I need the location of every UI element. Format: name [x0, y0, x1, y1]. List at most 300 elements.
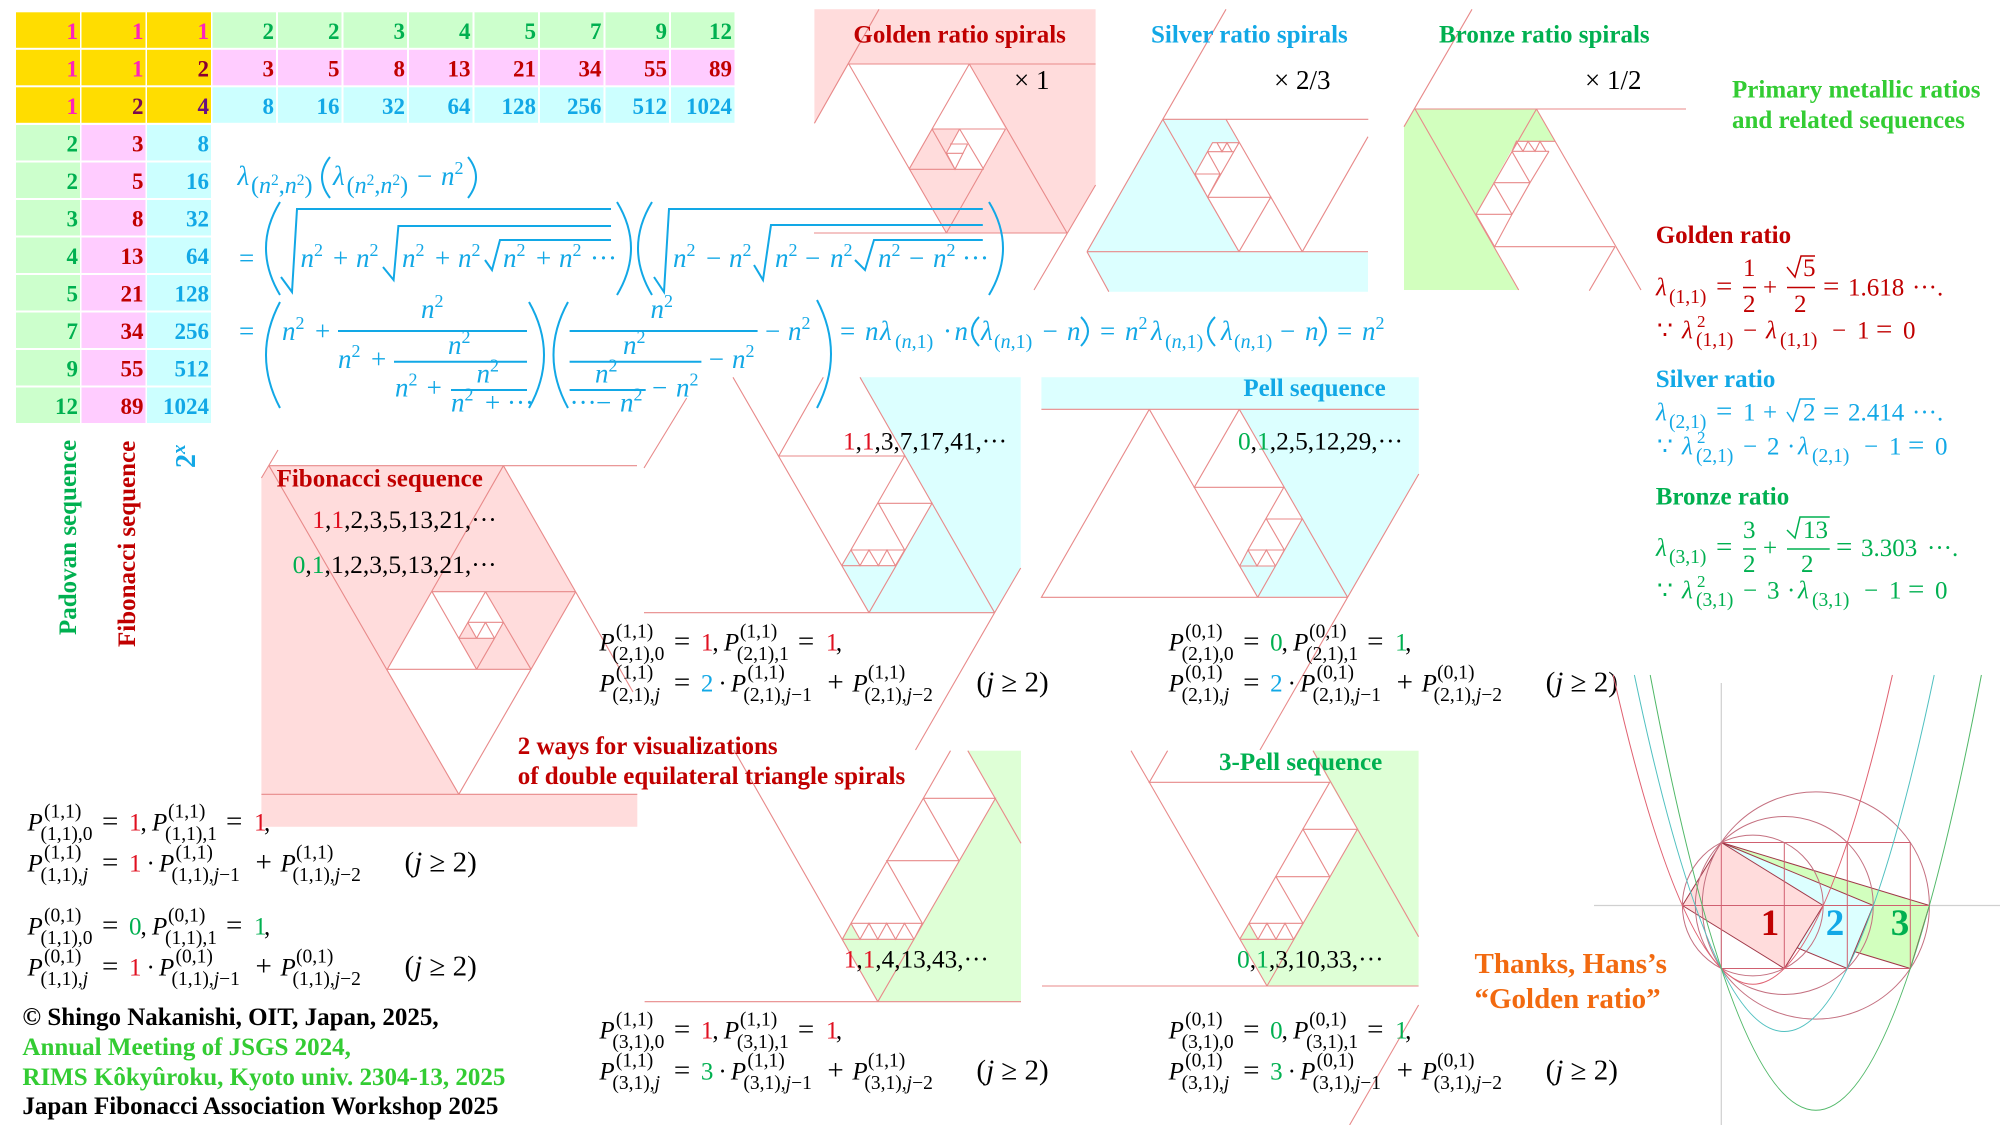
formula line 2: nested radicals: 2: [314, 240, 323, 260]
formula line 2: nested radicals: 2: [572, 240, 582, 260]
formula: P(0,1) over (1,1): ,: [140, 913, 147, 940]
panel: silver ratio spiral: [1087, 9, 1368, 292]
table numbers: 21: [513, 56, 536, 82]
table numbers: 34: [578, 56, 602, 82]
formula line 3: continued fractions: n: [595, 359, 608, 389]
axes: [1594, 683, 2000, 1125]
formula line 2: nested radicals: 2: [416, 240, 424, 260]
table numbers: 5: [132, 169, 144, 194]
table numbers: 9: [66, 357, 78, 382]
table numbers: 1: [132, 56, 144, 82]
table numbers: 55: [644, 56, 667, 82]
label: 2 to the x: x: [169, 444, 190, 455]
formula line 2: nested radicals: 2: [516, 240, 526, 260]
formula: P(1,1) over (1,1): 1: [129, 810, 142, 837]
formula line 3: continued fractions: n: [395, 373, 408, 403]
formula line 3: continued fractions: =: [1100, 316, 1115, 346]
formula: P(0,1) over (3,1): P: [1168, 1058, 1184, 1085]
table numbers: 13: [448, 56, 470, 82]
heading: primary metallic ratios: [1732, 76, 1981, 134]
block: bronze ratio definition: [1655, 484, 1958, 611]
top rows: [212, 12, 734, 123]
formula: nested radical and continued fraction identity: [236, 157, 1384, 418]
formula: P(0,1) over (2,1): =: [1243, 626, 1259, 658]
formula line 1: ,: [279, 173, 285, 199]
panel: 3-Pell spiral: [1042, 751, 1419, 1125]
block: bronze ratio definition: −: [1864, 578, 1878, 605]
block: bronze ratio definition: 13: [1803, 517, 1828, 544]
formula: P(0,1) over (3,1): ·: [1288, 1058, 1296, 1085]
note: 2 ways for visualizations: [518, 733, 905, 790]
formula: P(0,1) over (3,1): (3,1),j: [1182, 1073, 1229, 1094]
formula line 3: continued fractions: ···: [507, 388, 534, 418]
label: Padovan sequence: Padovan sequence: [55, 440, 82, 635]
formula: P(1,1) over (2,1): (1,1): [740, 622, 777, 643]
formula line 3: continued fractions: n: [676, 373, 690, 403]
block: golden ratio definition: λ: [1655, 275, 1667, 302]
heading: Fibonacci sequence: Fibonacci sequence: [277, 466, 483, 493]
bronze rectangle: [1702, 842, 1929, 968]
formula line 3: continued fractions: −: [1042, 316, 1058, 346]
table numbers: 89: [120, 394, 144, 419]
formula line 2: nested radicals: 2: [892, 240, 900, 260]
block: golden ratio definition: =: [1823, 271, 1839, 303]
formula line 2: nested radicals: n: [559, 243, 572, 273]
table numbers: 8: [262, 94, 274, 119]
formula: P(0,1) over (2,1): (0,1): [1309, 622, 1346, 643]
formula: P(0,1) over (1,1): ·: [146, 954, 155, 981]
formula line 3: continued fractions: n: [623, 330, 636, 360]
formula line 3: continued fractions: =: [239, 316, 254, 346]
corner cells: [16, 12, 211, 123]
formula: P(1,1) over (2,1): =: [674, 667, 690, 699]
block: bronze ratio definition: (3,1): [1669, 547, 1706, 568]
formula line 3: continued fractions: 2: [746, 341, 754, 361]
table numbers: 5: [66, 282, 78, 307]
formula line 2: nested radicals: 2: [742, 240, 752, 260]
diagram: parabolas, circles and metallic rectangles: [1594, 675, 2000, 1125]
sequence: Fibonacci seeds 0,1: 0,1,1,2,3,5,13,21,···: [293, 552, 497, 579]
formula: P(1,1) over (3,1): (3,1),1: [737, 1032, 789, 1053]
formula: P(1,1) over (2,1): (2,1),j: [612, 685, 660, 706]
block: silver ratio definition: 2: [1803, 400, 1816, 427]
formula: P(1,1) over (2,1): (1,1): [616, 622, 653, 643]
formula line 3: continued fractions: (: [895, 331, 902, 353]
heading: bronze ratio spirals: Bronze ratio spirals: [1439, 22, 1650, 49]
formula line 2: nested radicals: 2: [370, 240, 378, 260]
formula: P(1,1) over (3,1): [598, 1009, 1049, 1094]
block: silver ratio definition: Silver ratio: [1656, 366, 1775, 393]
thanks note: Thanks, Hans’s: [1474, 948, 1667, 980]
formula: P(0,1) over (3,1): 1: [1395, 1017, 1408, 1044]
formula: P(1,1) over (3,1): =: [798, 1013, 814, 1045]
formula line 3: continued fractions: +: [427, 373, 442, 403]
formula: P(0,1) over (1,1): (1,1),j: [40, 969, 88, 990]
formula: P(0,1) over (2,1): ,: [1282, 630, 1288, 657]
formula line 3: continued fractions: n: [476, 359, 490, 389]
block: golden ratio definition: =: [1716, 271, 1732, 303]
formula: P(1,1) over (1,1): [26, 802, 477, 886]
thanks note: “Golden ratio”: [1474, 983, 1661, 1015]
block: golden ratio definition: (1,1): [1669, 287, 1706, 308]
formula line 2: nested radicals: +: [333, 243, 348, 273]
formula line 2: nested radicals: 2: [946, 240, 956, 260]
formula line 2: nested radicals: 2: [686, 240, 696, 260]
formula line 3: continued fractions: [239, 291, 1384, 418]
numeral 1: 1: [1761, 903, 1779, 944]
block: silver ratio definition: 1: [1743, 400, 1756, 427]
table numbers: 2: [66, 169, 78, 194]
formula line 1: ): [304, 173, 312, 199]
formula: P(0,1) over (1,1): P: [26, 913, 43, 940]
table numbers: 32: [186, 207, 209, 232]
table numbers: 64: [448, 94, 471, 119]
block: bronze ratio definition: (3,1): [1812, 590, 1849, 611]
block: golden ratio definition: ···.: [1912, 275, 1943, 302]
formula: P(0,1) over (2,1): (0,1): [1185, 622, 1222, 643]
formula line 3: continued fractions: n: [788, 316, 802, 346]
block: silver ratio definition: ·: [1787, 434, 1795, 461]
formula: P(1,1) over (2,1): ,: [712, 630, 719, 657]
table numbers: 256: [567, 94, 602, 119]
formula: P(0,1) over (1,1): (1,1),j−1: [172, 969, 240, 990]
formula line 3: continued fractions: 2: [636, 327, 646, 347]
golden rectangle: [1682, 842, 1823, 968]
formula: P(0,1) over (1,1): ,: [264, 913, 270, 940]
formula: P(0,1) over (2,1): =: [1367, 626, 1383, 658]
formula: P(1,1) over (1,1): (1,1),j−1: [172, 865, 240, 886]
block: bronze ratio definition: 0: [1935, 578, 1948, 605]
formula: P(0,1) over (1,1): (1,1),0: [40, 928, 92, 949]
circles: [1682, 792, 1929, 1019]
block: silver ratio definition: ···.: [1912, 400, 1943, 427]
formula: P(1,1) over (3,1): (3,1),0: [612, 1032, 664, 1053]
formula: P(0,1) over (2,1): P: [1421, 671, 1437, 698]
formula line 1: 2: [367, 172, 374, 189]
formula line 3: continued fractions: 2: [690, 370, 698, 390]
block: bronze ratio definition: λ: [1681, 578, 1693, 605]
block: golden ratio definition: 1: [1857, 318, 1870, 345]
block: bronze ratio definition: 2: [1697, 572, 1706, 591]
formula: P(1,1) over (3,1): ,: [836, 1017, 842, 1044]
table numbers: 7: [590, 19, 602, 44]
sequence: Fibonacci seeds 1,1: 1,1,2,3,5,13,21,···: [312, 507, 497, 534]
table numbers: 9: [656, 19, 667, 44]
formula: P(0,1) over (2,1): 2: [1270, 671, 1283, 698]
formula: P(1,1) over (3,1): =: [674, 1013, 690, 1045]
formula line 3: continued fractions: λ: [1150, 316, 1163, 346]
formula line 3: continued fractions: 2: [664, 291, 673, 311]
formula: P(1,1) over (2,1): P: [851, 671, 868, 698]
formula line 2: nested radicals: 2: [844, 240, 852, 260]
formula: P(0,1) over (3,1): 3: [1270, 1058, 1283, 1085]
formula line 2: nested radicals: n: [503, 243, 516, 273]
formula: P(1,1) over (1,1): (1,1),1: [165, 824, 217, 845]
formula: P(0,1) over (2,1): (j ≥ 2): [1546, 667, 1618, 699]
formula line 3: continued fractions: −: [596, 388, 611, 418]
formula: P(1,1) over (1,1): 1: [129, 851, 142, 878]
formula: P(0,1) over (2,1): P: [1292, 630, 1308, 657]
formula line 2: nested radicals: n: [673, 243, 686, 273]
silver rectangle: [1695, 842, 1873, 968]
table numbers: 8: [132, 207, 144, 232]
table numbers: 64: [186, 244, 210, 269]
formula: P(0,1) over (2,1): (0,1): [1437, 663, 1474, 684]
block: silver ratio definition: =: [1823, 396, 1839, 428]
sequence: Pell numbers: 0,1,2,5,12,29,···: [1238, 428, 1403, 455]
formula: P(1,1) over (2,1): (2,1),j−1: [743, 685, 812, 706]
table numbers: 12: [709, 19, 732, 44]
table numbers: 2: [66, 132, 78, 157]
table numbers: 3: [394, 19, 405, 44]
table numbers: 8: [198, 132, 209, 157]
formula: P(0,1) over (2,1): (0,1): [1317, 663, 1354, 684]
formula: P(0,1) over (2,1): ·: [1288, 671, 1296, 698]
label: 2 to the x: 2: [171, 454, 202, 468]
block: bronze ratio definition: =: [1716, 531, 1732, 563]
formula: P(0,1) over (3,1): P: [1168, 1017, 1184, 1044]
formula: P(1,1) over (2,1): P: [730, 671, 746, 698]
formula line 3: continued fractions: n: [451, 388, 464, 418]
formula: P(1,1) over (3,1): =: [674, 1054, 690, 1086]
panel: (3,1) spiral with seeds 1,1: [645, 750, 1021, 1002]
block: bronze ratio definition: λ: [1655, 535, 1667, 562]
table numbers: 128: [502, 94, 536, 119]
formula: P(0,1) over (2,1): (0,1): [1185, 663, 1222, 684]
formula: P(1,1) over (2,1): P: [723, 630, 739, 657]
formula: P(1,1) over (1,1): (j ≥ 2): [404, 847, 477, 879]
block: bronze ratio definition: 2: [1743, 551, 1756, 578]
formula: P(1,1) over (3,1): P: [598, 1017, 615, 1044]
block: silver ratio definition: 0: [1935, 434, 1948, 461]
formula line 2: nested radicals: n: [300, 243, 314, 273]
formula: P(1,1) over (2,1): (2,1),1: [737, 644, 789, 665]
formula line 2: nested radicals: ···: [590, 243, 617, 273]
formula: P(1,1) over (2,1): 1: [826, 630, 838, 657]
formula line 2: nested radicals: 2: [788, 240, 798, 260]
formula: P(1,1) over (2,1): 2: [701, 671, 713, 698]
formula: P(0,1) over (2,1): P: [1299, 671, 1315, 698]
formula line 3: continued fractions: 2: [1138, 313, 1148, 333]
block: golden ratio definition: 1.618: [1848, 275, 1904, 302]
formula: P(1,1) over (3,1): (1,1): [868, 1050, 905, 1071]
block: golden ratio definition: −: [1832, 318, 1846, 345]
block: silver ratio definition: λ: [1797, 434, 1809, 461]
formula: P(0,1) over (3,1): [1168, 1009, 1618, 1094]
formula: P(1,1) over (2,1): P: [598, 630, 615, 657]
formula line 2: nested radicals: +: [536, 243, 551, 273]
formula line 3: continued fractions: ···: [570, 388, 597, 418]
credits: Japan Fibonacci Association Workshop 2025: [22, 1093, 498, 1120]
formula line 2: nested radicals: +: [435, 243, 450, 273]
formula line 2: nested radicals: −: [909, 243, 924, 273]
scale: times 1: × 1: [1014, 65, 1049, 95]
formula line 3: continued fractions: n: [732, 344, 746, 374]
thanks note: [1474, 948, 1667, 1015]
note: 2 ways for visualizations: of double equilateral triangle spirals: [518, 763, 905, 790]
table numbers: 1: [132, 19, 144, 44]
table numbers: 2: [262, 19, 274, 44]
block: bronze ratio definition: 1: [1889, 578, 1902, 605]
formula: P(0,1) over (3,1): (0,1): [1317, 1050, 1354, 1071]
formula: P(1,1) over (2,1): (1,1): [747, 663, 785, 684]
block: golden ratio definition: (1,1): [1780, 330, 1817, 351]
formula: P(1,1) over (1,1): P: [158, 851, 174, 878]
block: golden ratio definition: λ: [1765, 318, 1777, 345]
formula line 2: nested radicals: ···: [962, 243, 989, 273]
formula: P(0,1) over (3,1): ,: [1405, 1017, 1411, 1044]
formula line 3: continued fractions: n: [1125, 316, 1138, 346]
table numbers: 512: [174, 357, 209, 382]
formula: P(0,1) over (1,1): P: [280, 954, 296, 981]
formula line 3: continued fractions: 2: [464, 385, 474, 405]
formula: P(1,1) over (1,1): 1: [254, 810, 266, 837]
formula line 3: continued fractions: n: [421, 294, 434, 324]
formula line 3: continued fractions: 2: [408, 370, 418, 390]
formula line 2: nested radicals: n: [458, 243, 472, 273]
formula: P(1,1) over (1,1): =: [102, 806, 118, 838]
formula: P(0,1) over (3,1): (0,1): [1437, 1050, 1474, 1071]
table numbers: 34: [120, 319, 144, 344]
block: bronze ratio definition: −: [1743, 578, 1757, 605]
formula: P(0,1) over (2,1): (2,1),1: [1306, 644, 1358, 665]
formula line 3: continued fractions: 2: [608, 356, 618, 376]
formula: P(1,1) over (2,1): (1,1): [616, 663, 653, 684]
block: silver ratio definition: +: [1763, 400, 1777, 427]
formula: P(0,1) over (2,1): (2,1),j: [1182, 685, 1229, 706]
block: bronze ratio definition: 3.303: [1861, 535, 1917, 562]
parabolas: [1613, 675, 1981, 1110]
formula: P(0,1) over (1,1): 1: [254, 913, 266, 940]
formula: P(1,1) over (1,1): ·: [146, 851, 155, 878]
formula: P(0,1) over (1,1): 1: [129, 954, 142, 981]
formula: P(0,1) over (2,1): (2,1),j−1: [1313, 685, 1381, 706]
formula: P(0,1) over (1,1): (0,1): [176, 946, 213, 967]
block: silver ratio definition: (2,1): [1696, 446, 1733, 467]
block: silver ratio definition: 2.414: [1848, 400, 1905, 427]
block: silver ratio definition: −: [1864, 434, 1878, 461]
block: golden ratio definition: [1655, 222, 1943, 351]
block: silver ratio definition: 2: [1697, 428, 1706, 447]
block: golden ratio definition: 5: [1803, 255, 1816, 282]
formula: P(1,1) over (3,1): (3,1),j−2: [864, 1073, 933, 1094]
formula: P(1,1) over (3,1): P: [730, 1058, 746, 1085]
heading: Pell sequence: Pell sequence: [1243, 375, 1386, 402]
formula line 3: continued fractions: +: [485, 388, 500, 418]
block: silver ratio definition: 1: [1889, 434, 1902, 461]
block: silver ratio definition: λ: [1655, 400, 1667, 427]
scale: times 2/3: × 2/3: [1274, 65, 1330, 95]
formula line 1: 2: [271, 172, 279, 189]
formula: P(1,1) over (3,1): 1: [701, 1017, 713, 1044]
formula line 3: continued fractions: n: [620, 388, 634, 418]
formula: P(1,1) over (3,1): (1,1): [740, 1009, 777, 1030]
formula: P(0,1) over (1,1): P: [151, 913, 167, 940]
block: golden ratio definition: Golden ratio: [1656, 222, 1791, 249]
formula line 3: continued fractions: 2: [634, 385, 642, 405]
table numbers: 4: [198, 94, 210, 119]
formula: P(0,1) over (3,1): (3,1),j−2: [1434, 1073, 1502, 1094]
table numbers: 1024: [163, 394, 210, 419]
table numbers: 4: [66, 244, 78, 269]
formula line 3: continued fractions: +: [371, 344, 386, 374]
label: Fibonacci sequence column: Fibonacci sequence: [114, 441, 141, 647]
formula: P(1,1) over (1,1): P: [26, 810, 43, 837]
formula: P(0,1) over (1,1): +: [256, 950, 272, 982]
formula: P(0,1) over (1,1): (0,1): [44, 905, 81, 926]
table numbers: 2: [198, 56, 209, 82]
formula: P(1,1) over (1,1): (1,1),j−2: [292, 865, 361, 886]
table numbers: 1: [198, 19, 209, 44]
formula: P(1,1) over (3,1): ·: [718, 1058, 727, 1085]
formula line 2: nested radicals: −: [706, 243, 721, 273]
credits: © Shingo Nakanishi, OIT, Japan, 2025,: [22, 1004, 439, 1031]
block: silver ratio definition: [1655, 366, 1948, 467]
formula line 3: continued fractions: λ: [879, 316, 892, 346]
formula line 3: continued fractions: n,1): [1001, 331, 1032, 353]
table numbers: 21: [120, 282, 144, 307]
credits: Annual Meeting of JSGS 2024,: [22, 1034, 351, 1061]
formula: P(1,1) over (1,1): (1,1),0: [40, 824, 92, 845]
formula line 3: continued fractions: n: [1067, 316, 1080, 346]
formula: P(0,1) over (2,1): 1: [1395, 630, 1408, 657]
block: bronze ratio definition: +: [1763, 535, 1777, 562]
formula: P(1,1) over (2,1): (1,1): [868, 663, 905, 684]
sequence: 3-Pell numbers: 0,1,3,10,33,···: [1237, 946, 1384, 973]
block: silver ratio definition: λ: [1681, 434, 1693, 461]
formula line 2: nested radicals: n: [402, 243, 416, 273]
table numbers: 32: [382, 94, 405, 119]
formula: P(1,1) over (1,1): (1,1): [44, 802, 81, 823]
formula line 1: 2: [297, 172, 304, 189]
formula: P(0,1) over (3,1): ,: [1282, 1017, 1288, 1044]
formula line 2: nested radicals: −: [805, 243, 820, 273]
formula: P(0,1) over (1,1): [26, 905, 477, 990]
formula line 1: n: [441, 161, 454, 191]
formula: P(1,1) over (2,1): 1: [701, 630, 713, 657]
panel: Pell spiral: [1041, 377, 1419, 750]
formula: P(1,1) over (3,1): P: [723, 1017, 739, 1044]
formula line 1: ,: [374, 173, 380, 199]
table numbers: 2: [328, 19, 340, 44]
formula: P(0,1) over (3,1): 0: [1270, 1017, 1283, 1044]
formula: P(1,1) over (1,1): (1,1): [176, 843, 213, 864]
table numbers: 5: [328, 56, 340, 82]
formula line 3: continued fractions: n: [448, 330, 462, 360]
block: bronze ratio definition: 3: [1743, 517, 1756, 544]
formula line 3: continued fractions: (: [994, 331, 1001, 353]
formula line 3: continued fractions: =: [1337, 316, 1352, 346]
formula line 2: nested radicals: 2: [472, 240, 480, 260]
formula: P(0,1) over (3,1): =: [1367, 1013, 1383, 1045]
formula line 3: continued fractions: n: [1362, 316, 1376, 346]
formula line 2: nested radicals: n: [878, 243, 892, 273]
table numbers: 2: [132, 94, 144, 119]
block: bronze ratio definition: =: [1836, 531, 1852, 563]
formula: P(0,1) over (3,1): (0,1): [1309, 1009, 1346, 1030]
formula line 3: continued fractions: 2: [1376, 313, 1384, 333]
formula: P(0,1) over (3,1): =: [1243, 1054, 1259, 1086]
formula: P(0,1) over (2,1): [1168, 622, 1618, 706]
table numbers: 12: [55, 394, 78, 419]
formula line 3: continued fractions: n: [865, 316, 878, 346]
sequence: 1,1,4,13,43: 1,1,4,13,43,···: [844, 946, 989, 973]
block: silver ratio definition: =: [1908, 430, 1924, 462]
formula line 3: continued fractions: 2: [434, 291, 444, 311]
table numbers: 8: [394, 56, 405, 82]
block: golden ratio definition: 2: [1794, 291, 1806, 318]
table numbers: 3: [132, 132, 144, 157]
